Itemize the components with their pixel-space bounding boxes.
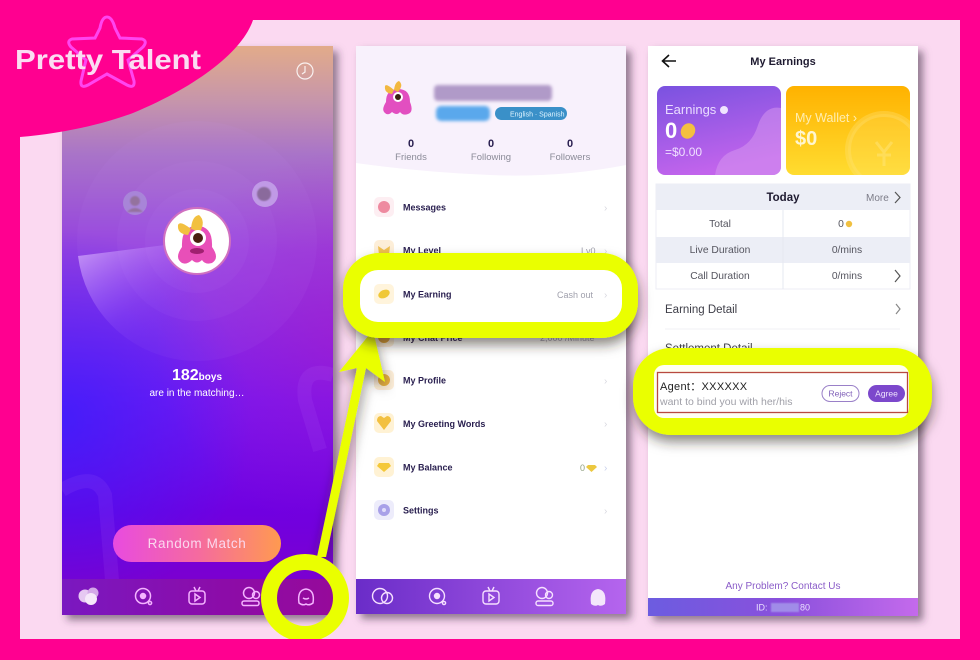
stat followers: Followers bbox=[550, 152, 591, 163]
profile header background bbox=[356, 46, 626, 176]
phone screen: my earnings bbox=[648, 46, 920, 616]
today table: Total bbox=[709, 219, 731, 230]
mascot small bbox=[383, 81, 412, 115]
menu: my earning: My Earning bbox=[403, 290, 452, 300]
phone screen: profile menu bbox=[356, 46, 626, 614]
radar rings bbox=[117, 190, 277, 321]
stat friends: 0 bbox=[408, 138, 414, 150]
menu: my earning: › bbox=[604, 290, 607, 301]
stat following: 0 bbox=[488, 138, 494, 150]
menu: my level: Lv0 bbox=[581, 246, 596, 256]
contact link: Any Problem? Contact Us bbox=[725, 581, 841, 592]
today table: 0/mins bbox=[832, 245, 862, 256]
stat following bbox=[471, 138, 511, 163]
icon: hearts outline bbox=[372, 588, 392, 604]
reject button: Reject bbox=[828, 388, 853, 398]
menu: my chat price: My Chat Price bbox=[403, 333, 463, 343]
blurred username bbox=[434, 85, 552, 101]
yellow arrow to my earning bbox=[317, 330, 385, 557]
id bar bbox=[648, 598, 918, 616]
menu: my earning: Cash out bbox=[557, 290, 594, 300]
icon: tv bbox=[189, 587, 205, 604]
today table bbox=[656, 184, 910, 289]
logo text: Pretty Talent bbox=[15, 44, 201, 75]
menu: settings: Settings bbox=[403, 506, 439, 516]
menu: my greeting words bbox=[374, 413, 607, 433]
mascot avatar bbox=[164, 208, 230, 274]
language badge bbox=[495, 107, 567, 120]
user bubble left bbox=[123, 191, 147, 215]
icon: hearts bbox=[78, 588, 98, 605]
radar sweep wedge bbox=[78, 246, 171, 322]
stat followers: 0 bbox=[567, 138, 573, 150]
menu: messages: › bbox=[604, 203, 607, 214]
icon: people outline bbox=[536, 588, 553, 606]
agent message: want to bind you with her/his bbox=[659, 396, 792, 408]
icon: profile filled bbox=[591, 589, 605, 606]
today table: 0 bbox=[838, 219, 844, 230]
faint background shapes bbox=[62, 373, 333, 580]
stat following: Following bbox=[471, 152, 511, 163]
highlight: agent request bbox=[633, 348, 932, 435]
menu: my profile bbox=[374, 370, 607, 390]
menu: my balance: 0 bbox=[580, 463, 585, 473]
agree button: Agree bbox=[875, 388, 898, 398]
red outline bbox=[658, 372, 908, 412]
menu: my chat price: 2,000 /Minute bbox=[540, 333, 595, 343]
icon: profile ghost bbox=[299, 589, 313, 605]
earning detail row: Earning Detail bbox=[665, 304, 737, 316]
logo corner shape bbox=[0, 0, 253, 137]
earnings card: 0 bbox=[665, 118, 677, 143]
blurred badge bbox=[436, 106, 490, 121]
menu: my level bbox=[374, 240, 607, 260]
wallet card bbox=[786, 86, 910, 175]
today table: Call Duration bbox=[690, 271, 750, 282]
menu: my level: › bbox=[604, 246, 607, 257]
phone screen: random match bbox=[62, 46, 333, 615]
today table: 0/mins bbox=[832, 271, 862, 282]
menu: my profile: My Profile bbox=[403, 376, 446, 386]
highlight: my earning bbox=[343, 253, 638, 338]
menu: my earning bbox=[374, 284, 607, 304]
reject button bbox=[822, 386, 859, 402]
wallet card: My Wallet › bbox=[795, 111, 857, 125]
menu: messages bbox=[374, 197, 607, 217]
match status: are in the matching… bbox=[149, 388, 245, 399]
icon: search bbox=[136, 588, 152, 605]
id bar: ID: bbox=[756, 602, 768, 612]
menu: messages: Messages bbox=[403, 202, 446, 212]
icon: search outline bbox=[430, 588, 446, 605]
logo star outline bbox=[69, 17, 145, 86]
menu: my level: My Level bbox=[403, 246, 441, 256]
id bar: 80 bbox=[800, 602, 810, 612]
today table: Live Duration bbox=[690, 245, 751, 256]
menu: settings: › bbox=[604, 506, 607, 517]
today table: More bbox=[866, 193, 889, 204]
random match button: Random Match bbox=[148, 536, 246, 551]
earning detail row bbox=[665, 304, 900, 329]
earnings card bbox=[657, 86, 781, 175]
yellow ring on profile tab bbox=[269, 562, 341, 634]
icon: tv outline bbox=[483, 587, 499, 604]
agent name: Agent：XXXXXX bbox=[660, 381, 748, 393]
wallet card: $0 bbox=[795, 128, 817, 150]
user bubble right bbox=[252, 181, 278, 207]
stat followers bbox=[550, 138, 591, 163]
nav bar phone 2 bbox=[356, 579, 626, 614]
language badge: English · Spanish bbox=[510, 112, 565, 118]
match count: 182boys bbox=[172, 367, 222, 384]
stat friends bbox=[395, 138, 427, 163]
menu: my profile: › bbox=[604, 376, 607, 387]
icon: people bbox=[242, 588, 260, 606]
menu: my greeting words: My Greeting Words bbox=[403, 419, 485, 429]
today table: Today bbox=[766, 192, 800, 204]
settlement detail row: Settlement Detail bbox=[665, 343, 753, 355]
stat friends: Friends bbox=[395, 152, 427, 163]
menu: my balance bbox=[374, 457, 607, 477]
menu: settings bbox=[374, 500, 607, 520]
random match button bbox=[113, 525, 281, 562]
menu: my chat price bbox=[374, 327, 595, 347]
menu: my balance: › bbox=[604, 463, 607, 474]
earnings card: =$0.00 bbox=[665, 145, 702, 159]
nav bar background bbox=[62, 579, 333, 615]
menu: my balance: My Balance bbox=[403, 462, 453, 472]
earnings card: Earnings bbox=[665, 102, 717, 117]
agree button bbox=[868, 385, 905, 402]
screen title: My Earnings bbox=[750, 56, 816, 68]
history clock icon bbox=[297, 63, 313, 79]
back arrow bbox=[662, 55, 676, 67]
nav icons phone 1 bbox=[78, 587, 313, 606]
menu: my greeting words: › bbox=[604, 419, 607, 430]
